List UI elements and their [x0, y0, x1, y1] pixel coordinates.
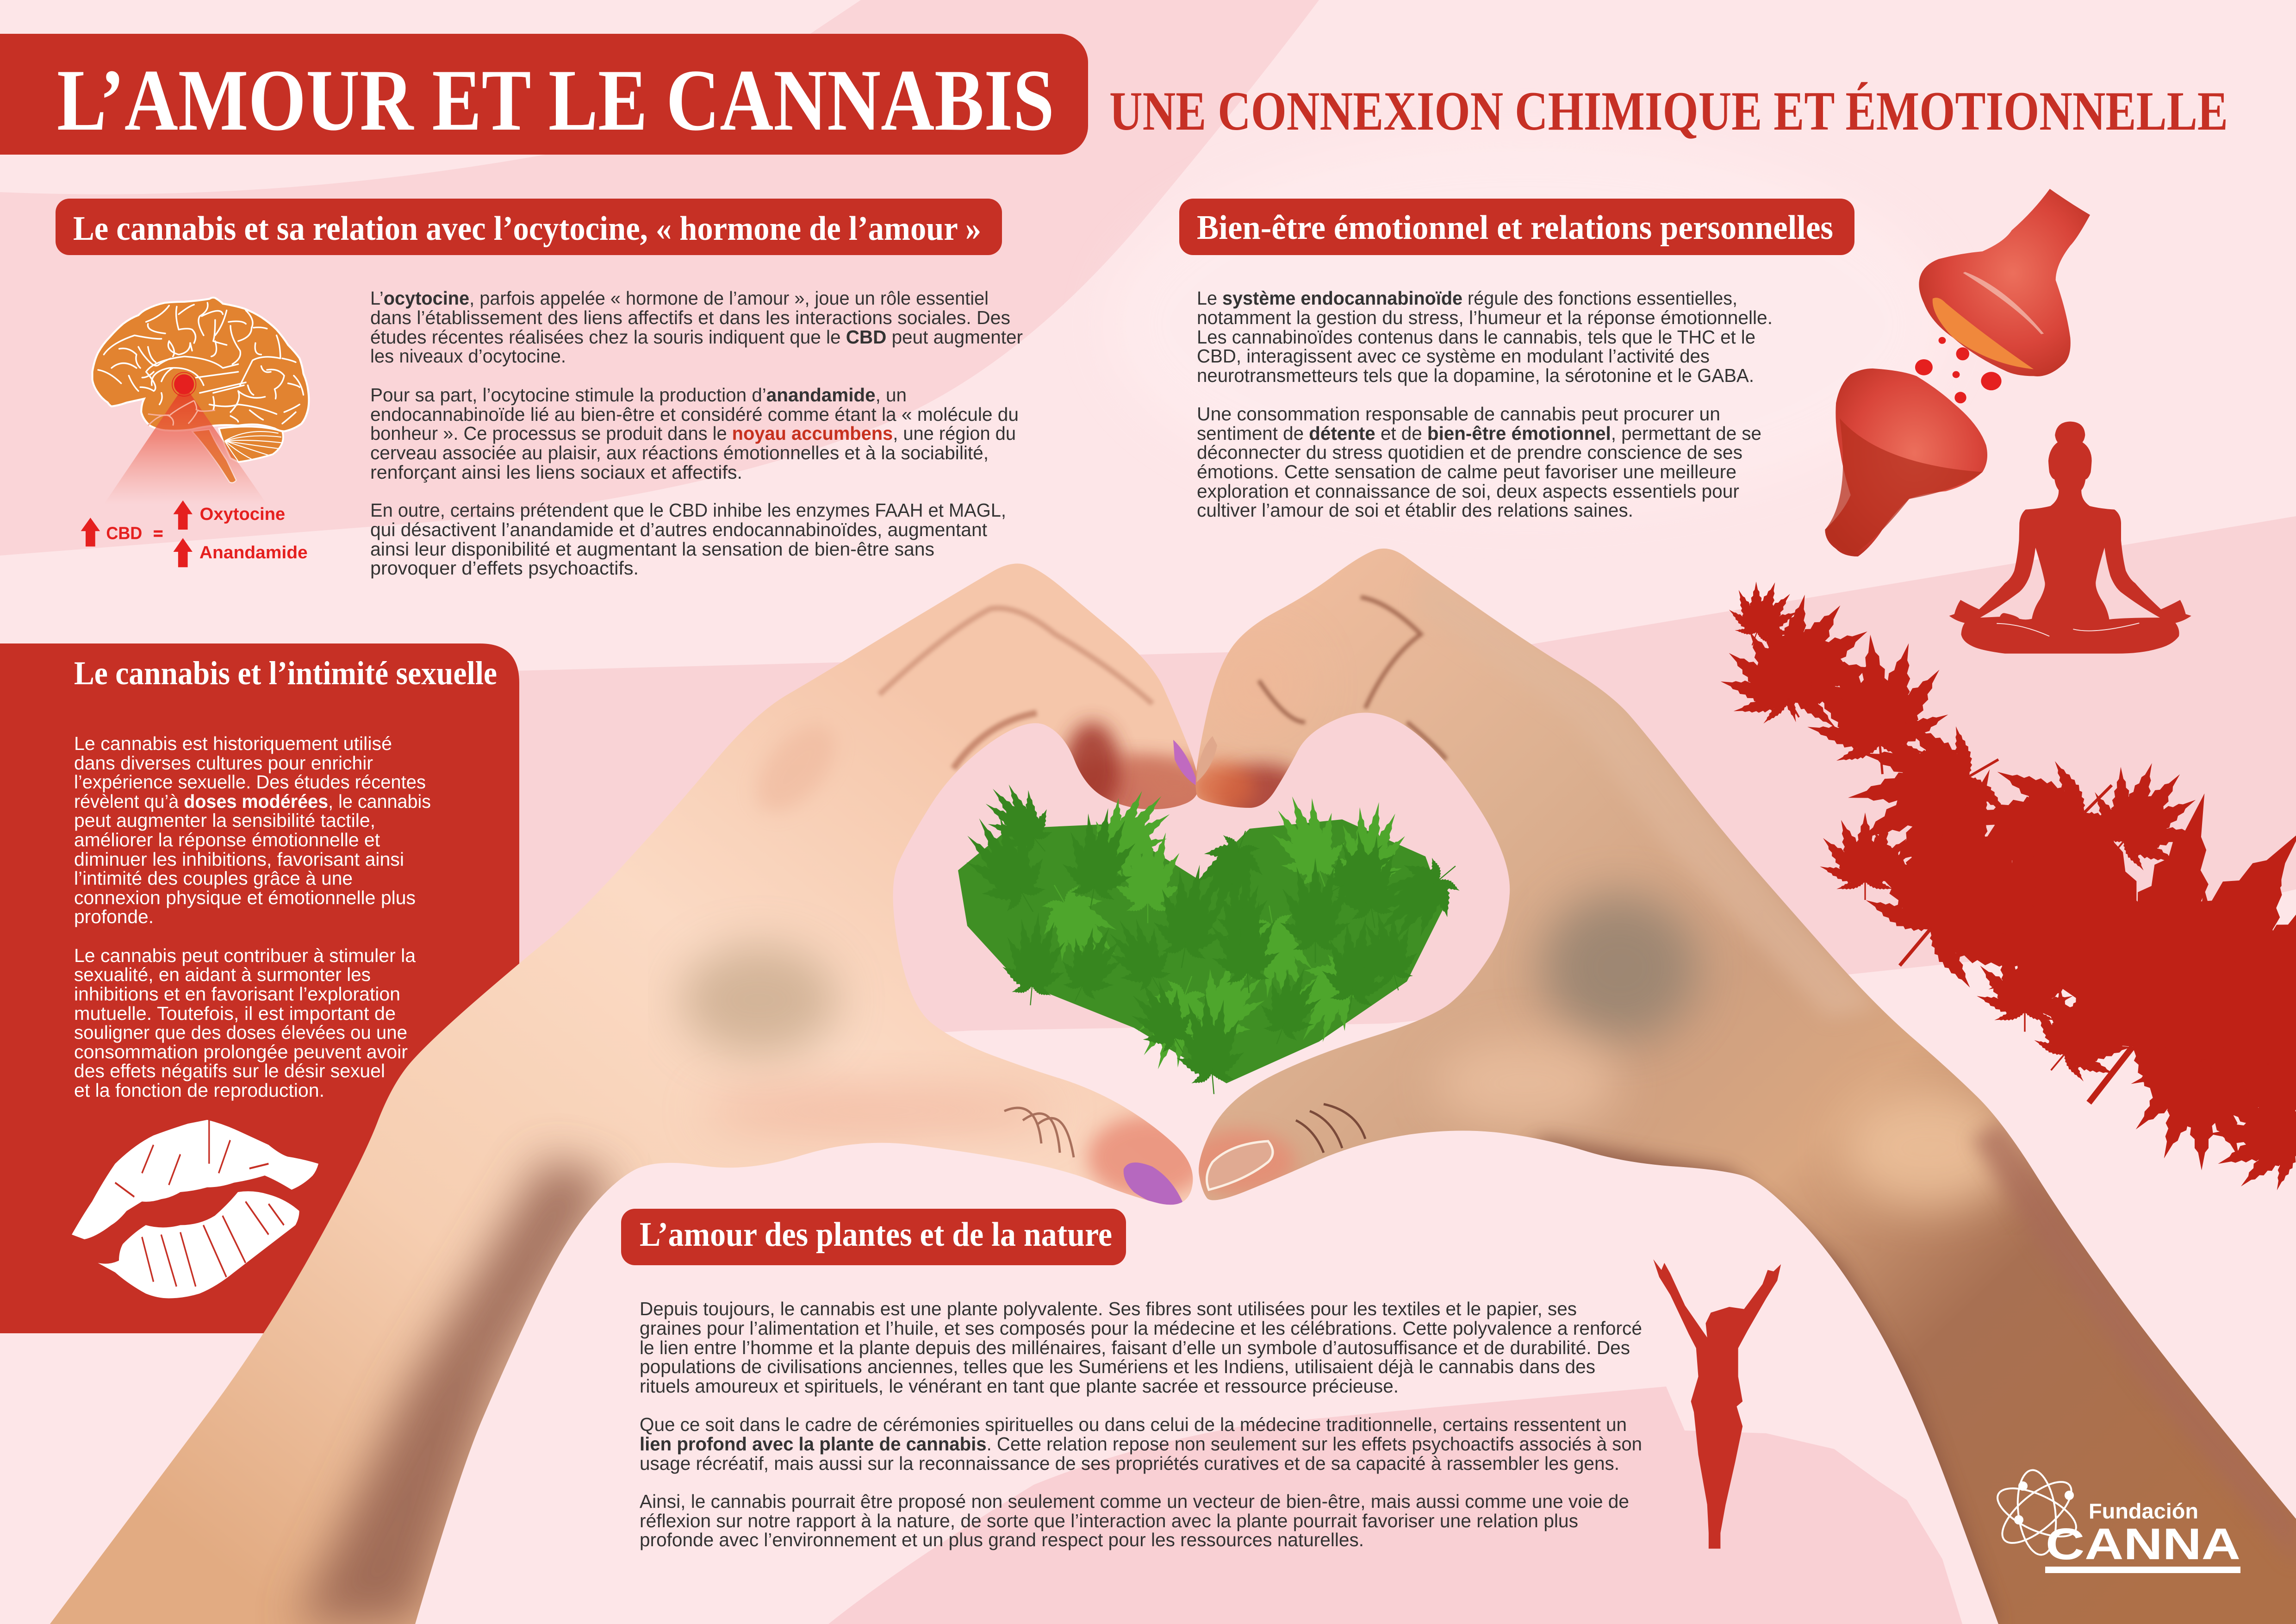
panel: intimité sexuelle — [0, 643, 519, 1333]
icon: synapse — [1825, 189, 2090, 556]
text block: plantes et nature: rituels amoureux et spirituels, le vénérant en tant que plante sacrée et ressource précieuse. — [640, 1375, 1399, 1397]
text block: intimité sexuelle: diminuer les inhibitions, favorisant ainsi — [74, 849, 404, 870]
text block: ocytocine: dans l’établissement des liens affectifs et dans les interactions sociales. Des — [370, 307, 1010, 328]
text block: ocytocine: études récentes réalisées chez la souris indiquent que le CBD peut augmenter — [370, 326, 1023, 348]
brain stem — [192, 430, 236, 483]
text block: bien-être: neurotransmetteurs tels que la dopamine, la sérotonine et le GABA. — [1197, 365, 1754, 386]
cerebrum — [93, 298, 309, 431]
text block: plantes et nature: le lien entre l’homme et la plante depuis des millénaires, faisant d’elle un symbole d’autosuffisance et de durabilité. Des — [640, 1337, 1630, 1358]
text block: bien-être: CBD, interagissent avec ce système en modulant l’activité des — [1197, 345, 1710, 367]
text block: intimité sexuelle: l’intimité des couples grâce à une — [74, 868, 353, 889]
text block: intimité sexuelle: dans diverses cultures pour enrichir — [74, 752, 373, 774]
neurotransmitter droplets — [1915, 337, 2002, 403]
text block: ocytocine: bonheur ». Ce processus se produit dans le noyau accumbens, une région du — [370, 423, 1016, 444]
text block: plantes et nature: lien profond avec la plante de cannabis. Cette relation repose non seulement sur les effets psychoactifs associés à son — [640, 1433, 1642, 1455]
text block: plantes et nature: Que ce soit dans le cadre de cérémonies spirituelles ou dans celui de la médecine traditionnelle, certains ressentent un — [640, 1414, 1627, 1435]
text block: intimité sexuelle: sexualité, en aidant à surmonter les — [74, 964, 371, 985]
text block: bien-être: Les cannabinoïdes contenus dans le cannabis, tels que le THC et le — [1197, 326, 1755, 348]
text block: bien-être — [1197, 287, 1773, 521]
logo: Fundación CANNA: CANNA — [2046, 1519, 2240, 1569]
text block: bien-être: exploration et connaissance de soi, deux aspects essentiels pour — [1197, 481, 1739, 502]
text block: intimité sexuelle: souligner que des doses élevées ou une — [74, 1022, 407, 1043]
heading: bien-être — [1179, 199, 1854, 255]
text block: ocytocine: ainsi leur disponibilité et augmentant la sensation de bien-être sans — [370, 538, 934, 560]
icon: jumping woman — [1653, 1259, 1781, 1549]
text block: bien-être: notamment la gestion du stress, l’humeur et la réponse émotionnelle. — [1197, 307, 1773, 328]
text block: ocytocine: L’ocytocine, parfois appelée « hormone de l’amour », joue un rôle essentiel — [370, 287, 989, 309]
purple finger nail — [1173, 740, 1196, 785]
equation: CBD — [106, 524, 142, 543]
text block: intimité sexuelle: consommation prolongée peuvent avoir — [74, 1041, 408, 1062]
text block: ocytocine: les niveaux d’ocytocine. — [370, 345, 566, 367]
atom — [1991, 1468, 2083, 1557]
heading: ocytocine — [56, 199, 1002, 255]
logo: Fundación CANNA — [1991, 1468, 2240, 1573]
left arm overlap above panel — [46, 944, 648, 1624]
lower neuron — [1825, 369, 1987, 556]
text block: ocytocine — [370, 287, 1023, 579]
text block: ocytocine: En outre, certains prétendent que le CBD inhibe les enzymes FAAH et MAGL, — [370, 500, 1006, 521]
icon: brain with CBD equation — [81, 298, 309, 567]
equation: Anandamide — [199, 543, 308, 562]
red cannabis leaves — [1699, 568, 2296, 1227]
cerebellum — [219, 426, 283, 462]
text block: bien-être: Une consommation responsable de cannabis peut procurer un — [1197, 403, 1720, 425]
text block: intimité sexuelle: l’expérience sexuelle. Des études récentes — [74, 771, 426, 793]
nucleus accumbens dot — [172, 372, 196, 396]
text block: ocytocine: renforçant ainsi les liens sociaux et affectifs. — [370, 462, 742, 483]
title bar — [0, 34, 1088, 155]
text block: intimité sexuelle: Le cannabis peut contribuer à stimuler la — [74, 945, 416, 966]
text block: plantes et nature: Depuis toujours, le cannabis est une plante polyvalente. Ses fibres sont utilisées pour les textiles et le papier, ses — [640, 1298, 1577, 1319]
text block: ocytocine: cerveau associée au plaisir, aux réactions émotionnelles et à la sociabilité, — [370, 442, 989, 463]
text block: plantes et nature: Ainsi, le cannabis pourrait être proposé non seulement comme un vecteur de bien-être, mais aussi comme une voie de — [640, 1491, 1629, 1512]
logo: Fundación CANNA: Fundación — [2089, 1499, 2198, 1523]
heading: bien-être: Bien-être émotionnel et relations personnelles — [1197, 209, 1833, 247]
text block: bien-être: déconnecter du stress quotidien et de prendre conscience de ses — [1197, 442, 1742, 463]
text block: intimité sexuelle: et la fonction de reproduction. — [74, 1080, 324, 1101]
text block: intimité sexuelle: améliorer la réponse émotionnelle et — [74, 829, 380, 850]
text block: ocytocine: qui désactivent l’anandamide et d’autres endocannabinoïdes, augmentant — [370, 519, 988, 540]
purple thumb nail — [1124, 1162, 1182, 1205]
text block: plantes et nature: réflexion sur notre rapport à la nature, de sorte que l’interaction avec la plante pourrait favoriser une relation plus — [640, 1510, 1578, 1531]
text block: intimité sexuelle: Le cannabis est historiquement utilisé — [74, 733, 392, 754]
left hand — [50, 563, 1197, 1624]
equation — [81, 500, 308, 567]
thumb wrinkles — [1004, 1108, 1074, 1157]
text block: bien-être: Le système endocannabinoïde régule des fonctions essentielles, — [1197, 287, 1737, 309]
icon: meditating woman — [1949, 421, 2191, 654]
text block: bien-être: sentiment de détente et de bien-être émotionnel, permettant de se — [1197, 423, 1761, 444]
text block: ocytocine: Pour sa part, l’ocytocine stimule la production d’anandamide, un — [370, 384, 907, 406]
text block: ocytocine: endocannabinoïde lié au bien-être et considéré comme étant la « molécule du — [370, 404, 1019, 425]
text block: intimité sexuelle: peut augmenter la sensibilité tactile, — [74, 810, 375, 831]
green cannabis heart — [946, 769, 1479, 1097]
right finger nail — [1196, 736, 1217, 782]
text block: intimité sexuelle: profonde. — [74, 906, 154, 927]
heading: plantes et nature — [621, 1209, 1126, 1265]
text block: bien-être: émotions. Cette sensation de calme peut favoriser une meilleure — [1197, 461, 1736, 482]
text block: plantes et nature: profonde avec l’environnement et un plus grand respect pour les ressources naturelles. — [640, 1529, 1364, 1550]
equation: Oxytocine — [200, 504, 285, 524]
text block: plantes et nature: graines pour l’alimentation et l’huile, et ses composés pour la médecine et les célébrations. Cette polyvalence a renforcé — [640, 1318, 1642, 1339]
heading: plantes et nature: L’amour des plantes et de la nature — [640, 1216, 1112, 1254]
right thumb nail — [1207, 1141, 1273, 1190]
red projection — [104, 385, 267, 504]
text block: bien-être: cultiver l’amour de soi et établir des relations saines. — [1197, 500, 1633, 521]
text block: intimité sexuelle: mutuelle. Toutefois, il est important de — [74, 1003, 396, 1024]
heading: intimité sexuelle: Le cannabis et l’intimité sexuelle — [74, 655, 497, 692]
upper neuron — [1919, 189, 2090, 376]
text block: intimité sexuelle: des effets négatifs sur le désir sexuel — [74, 1060, 385, 1081]
right hand — [1157, 509, 2296, 1624]
icon: kiss lips — [72, 1120, 318, 1298]
text block: intimité sexuelle: révèlent qu’à doses modérées, le cannabis — [74, 791, 431, 812]
text block: plantes et nature: populations de civilisations anciennes, telles que les Sumériens et les Indiens, utilisaient déjà le cannabis dans des — [640, 1356, 1595, 1377]
text block: plantes et nature: usage récréatif, mais aussi sur la reconnaissance de ses propriétés curatives et de sa capacité à rassembler les gens. — [640, 1453, 1619, 1474]
text block: plantes et nature — [640, 1298, 1642, 1550]
title bar: L’AMOUR ET LE CANNABIS — [57, 52, 1054, 149]
heading: ocytocine: Le cannabis et sa relation avec l’ocytocine, « hormone de l’amour » — [73, 210, 981, 248]
gyri — [98, 303, 304, 424]
text block: intimité sexuelle: connexion physique et émotionnelle plus — [74, 887, 416, 908]
text block: ocytocine: provoquer d’effets psychoactifs. — [370, 557, 639, 579]
text block: intimité sexuelle: inhibitions et en favorisant l’exploration — [74, 983, 400, 1005]
text block: intimité sexuelle — [74, 733, 431, 1101]
